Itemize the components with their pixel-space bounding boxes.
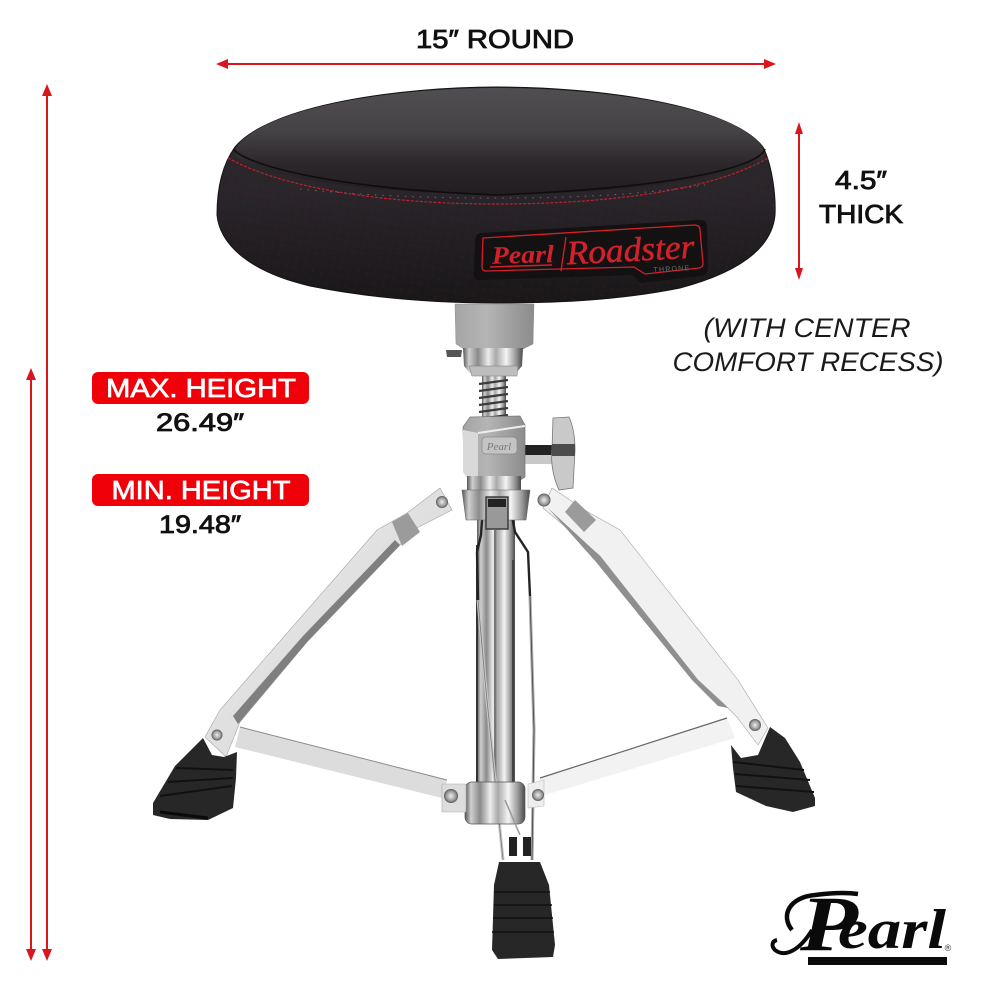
hinge bracket: [462, 490, 530, 529]
label: 4.5 inch thick: [819, 165, 904, 229]
clamp block: [463, 416, 525, 501]
badge: Pearl: [490, 241, 554, 270]
seat post: [446, 304, 534, 376]
wing bolt: [520, 417, 575, 490]
leg: right: [538, 488, 768, 745]
label: min height: [92, 474, 309, 539]
cushion side: [217, 87, 775, 303]
cushion perforation: [218, 170, 774, 303]
strut: right: [540, 718, 735, 795]
foot: right: [731, 727, 815, 812]
dimension: 15 inch round: [216, 24, 776, 69]
label: min height: 19.48″: [159, 511, 241, 539]
strut: left: [235, 727, 447, 798]
drum throne: [153, 87, 815, 959]
arrow: seat width: [216, 59, 776, 69]
logo: Pearl: P: [799, 880, 860, 967]
note: with center comfort recess: COMFORT RECESS): [672, 347, 944, 377]
spring: [479, 375, 508, 423]
foot: left: [153, 738, 237, 820]
label: 4.5 inch thick: THICK: [819, 199, 904, 229]
label: min height: MIN. HEIGHT: [112, 475, 291, 505]
heading: 15 inch round label: 15″ ROUND: [416, 24, 574, 54]
leg: left: [205, 488, 452, 757]
label: 4.5 inch thick: 4.5″: [835, 165, 887, 195]
label: max height: MAX. HEIGHT: [106, 373, 296, 403]
arrow: minimum height: [26, 368, 36, 961]
cushion top: [235, 88, 765, 194]
label: max height: [92, 372, 309, 437]
badge: THRONE: [653, 265, 690, 274]
logo: Pearl: ®: [945, 943, 952, 953]
arrow: maximum height: [42, 84, 52, 961]
foot: centre: [492, 862, 555, 959]
label: max height: 26.49″: [156, 409, 244, 437]
centre column: [476, 505, 534, 860]
logo: Pearl: [773, 880, 952, 967]
red stitching: [228, 158, 768, 204]
logo: Pearl: earl: [838, 899, 947, 961]
badge: [474, 220, 708, 283]
lower bracket: [442, 780, 544, 856]
arrow: seat thickness: [795, 122, 803, 280]
note: with center comfort recess: (WITH CENTER: [704, 313, 910, 343]
seat cushion: [217, 87, 775, 303]
note: with center comfort recess: [672, 313, 944, 377]
badge: Roadster: [565, 229, 696, 272]
clamp block: Pearl: [486, 441, 511, 453]
